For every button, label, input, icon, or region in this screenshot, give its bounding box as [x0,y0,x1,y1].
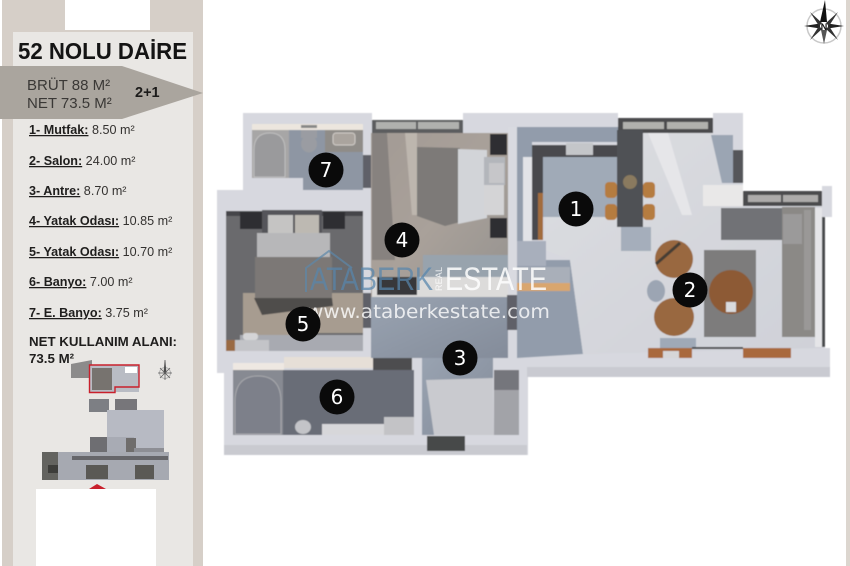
room area list: 6- Banyo: 7.00 m² [29,275,133,289]
lounge chairs [647,240,696,348]
marker 6 [320,380,354,414]
marker 1: 1 [570,197,582,221]
marker 3 [442,340,478,376]
highlighted apartment outline [90,365,139,392]
room 4: bedroom [371,120,508,297]
net usable area [29,334,177,366]
marker 4: 4 [396,228,408,252]
floor plan [217,113,832,455]
partition wall [508,127,517,295]
rooms 1 and 2: kitchen and living room [517,118,825,358]
net usable area: NET KULLANIM ALANI: [29,334,177,349]
rug and coffee table [704,250,756,337]
marker 6: 6 [331,385,343,409]
kitchen counters [517,143,617,266]
watermark: www.ataberkestate.com [307,301,550,323]
watermark: ATABERK [310,261,433,297]
room area list: 5- Yatak Odası: 10.70 m² [29,245,172,259]
room area list [29,123,172,320]
room area list: 2- Salon: 24.00 m² [29,154,135,168]
panel: sidebar [0,0,203,566]
sofa [721,191,825,347]
marker 4 [384,222,420,258]
arrow banner: gross and net area: 2+1 [135,85,160,101]
watermark: REAL [434,267,444,291]
room area list: 7- E. Banyo: 3.75 m² [29,306,148,320]
arrow banner: gross and net area: NET 73.5 M² [27,95,112,112]
marker 2 [672,272,708,308]
white cover block [36,489,156,566]
room 7: en-suite bathroom [252,124,371,190]
watermark: ESTATE [445,261,547,297]
arrow banner: gross and net area: BRÜT 88 M² [27,76,110,94]
room 5: bedroom [226,210,363,351]
background right strip [846,0,850,566]
arrow banner: gross and net area [0,66,203,119]
room area list: 1- Mutfak: 8.50 m² [29,123,135,137]
room area list: 3- Antre: 8.70 m² [29,184,127,198]
key plan of floor [42,360,172,489]
icon: north compass: N [821,22,827,32]
orange strip and block near door [517,267,570,291]
watermark [306,251,550,323]
marker 2: 2 [684,278,696,302]
marker 1 [558,192,594,226]
marker 3: 3 [454,346,466,370]
room area list: 4- Yatak Odası: 10.85 m² [29,214,172,228]
dining table and island [605,118,713,251]
heading: apartment number: 52 NOLU DAİRE [18,38,187,64]
room 3: entrance hall [363,293,519,451]
red entrance marker [89,484,106,489]
marker 5 [286,306,320,342]
icon: small compass [158,360,172,380]
marker 7: 7 [320,158,332,182]
room 6: main bathroom [233,352,414,435]
net usable area: 73.5 M² [29,351,75,366]
room number markers [286,152,708,414]
walls [217,113,832,455]
window sills [648,150,791,358]
marker 5: 5 [297,312,309,336]
icon: north compass [804,0,844,44]
marker 7 [308,152,344,188]
